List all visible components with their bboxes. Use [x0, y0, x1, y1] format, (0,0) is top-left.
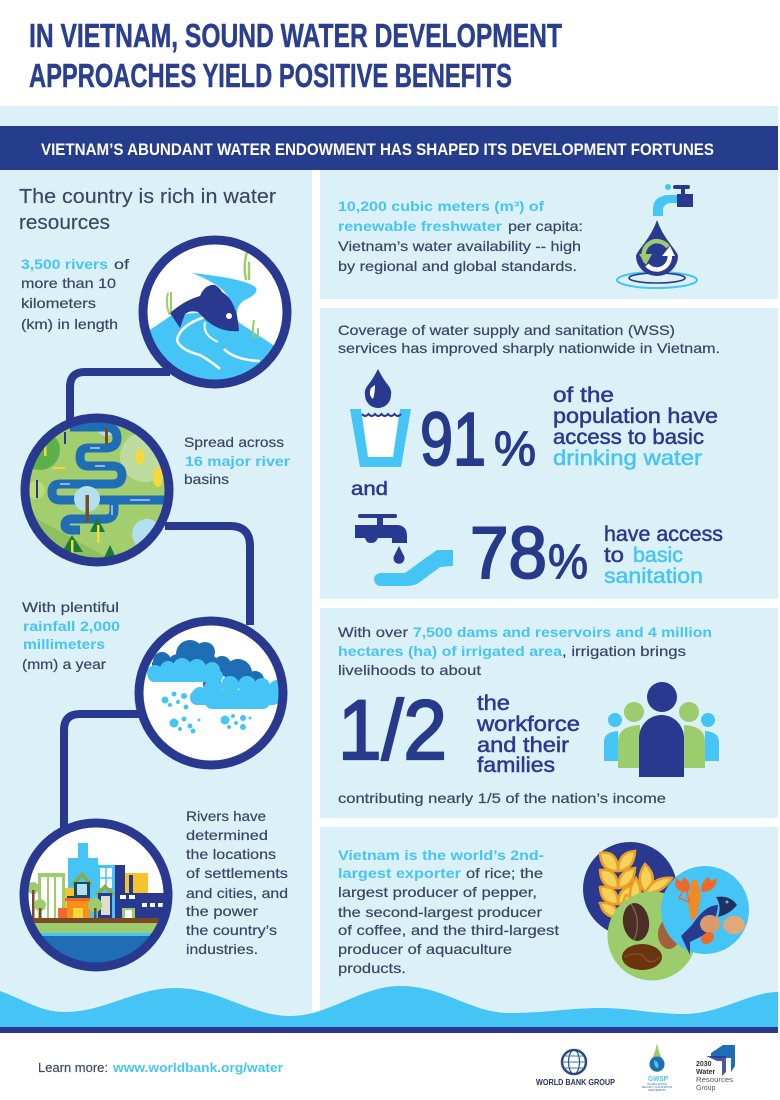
logo: 2030 Water Resources Group — [696, 1045, 735, 1092]
icon: fish and river circle — [130, 240, 290, 400]
footer link — [38, 1061, 283, 1075]
logo: 2030 Water Resources Group: Resources — [696, 1077, 734, 1084]
stat: one half: 1/2 — [338, 683, 447, 777]
text: rivers and settlements: the power — [186, 903, 258, 919]
panel: water availability — [320, 170, 778, 299]
text: dams and irrigated area — [338, 624, 712, 678]
icon: faucet and recycling water drop — [617, 184, 697, 288]
connector lines — [64, 372, 250, 830]
text: rainfall — [22, 599, 120, 672]
logo: GWSP: PARTNERSHIP — [648, 1089, 666, 1092]
text: exports and production — [338, 847, 559, 976]
text: 3,500 rivers: (km) in length — [21, 316, 118, 332]
stat: 91 percent: % — [494, 423, 536, 476]
panel: irrigation — [320, 608, 778, 818]
stat: 91 percent: 91 — [420, 397, 486, 481]
text: drinking water access: drinking water — [553, 447, 702, 470]
panel: top strip background — [0, 106, 778, 126]
text: rivers and settlements: of settlements — [186, 865, 288, 881]
icon: coffee — [608, 892, 696, 980]
text: rivers and settlements: and cities, and — [186, 885, 288, 901]
text: workforce and families: families — [477, 754, 555, 777]
logo: 2030 Water Resources Group: Group — [696, 1085, 716, 1092]
logo: 2030 Water Resources Group: 2030 — [696, 1061, 712, 1068]
text: rivers and settlements: the locations — [186, 846, 276, 862]
text: dams and irrigated area: With over — [338, 624, 408, 640]
text: drinking water access: of the — [553, 384, 614, 407]
text: dams and irrigated area: 7,500 dams and reservoirs and 4 million — [413, 624, 712, 640]
text: rainfall: rainfall 2,000 — [23, 618, 120, 634]
text: workforce and families: and their — [477, 734, 569, 757]
text: river basins — [184, 434, 291, 487]
text: 3,500 rivers: of — [114, 256, 129, 272]
text: workforce and families: the — [477, 692, 510, 715]
text: exports and production: the second-largest producer — [338, 904, 542, 920]
text: 3,500 rivers — [21, 256, 129, 332]
title: IN VIETNAM, SOUND WATER DEVELOPMENT — [29, 17, 562, 54]
logo: GWSP: GLOBAL WATER — [647, 1083, 667, 1086]
banner — [0, 126, 778, 170]
panel: exports — [320, 827, 778, 1030]
title: APPROACHES YIELD POSITIVE BENEFITS — [29, 57, 512, 94]
text: rivers and settlements: the country’s — [186, 922, 277, 938]
icon: rain clouds circle — [139, 621, 285, 765]
stat: 78 percent: % — [548, 536, 588, 589]
heading: rich in water resources: The country is rich in water — [19, 186, 276, 208]
text: rivers and settlements — [186, 808, 288, 957]
icon: rice — [583, 842, 677, 936]
icon: tap and hand — [355, 514, 453, 586]
text: exports and production: products. — [338, 960, 406, 976]
icon: glass of water — [350, 369, 411, 467]
text: sanitation access: to — [604, 544, 624, 567]
text: rivers and settlements: determined — [186, 827, 268, 843]
text: exports and production: of coffee, and the third-largest — [338, 922, 559, 938]
icon: seafood — [661, 866, 749, 955]
text: river basins: Spread across — [184, 434, 284, 450]
text: workforce and families: workforce — [476, 713, 580, 736]
text: 3,500 rivers: 3,500 rivers — [21, 256, 108, 272]
text: coverage intro: services has improved sharply nationwide in Vietnam. — [338, 340, 720, 356]
text: dams and irrigated area: hectares (ha) of irrigated area — [338, 643, 562, 659]
text: sanitation access: sanitation — [604, 565, 703, 588]
icon: river basin circle — [20, 418, 170, 570]
text: exports and production: producer of aquaculture — [338, 941, 512, 957]
stat: 78 percent: 78 — [470, 513, 547, 594]
text: sanitation access — [604, 523, 723, 588]
icon: group of people — [604, 682, 719, 777]
logo: GWSP: GWSP — [648, 1074, 668, 1083]
text: river basins: 16 major river — [185, 453, 291, 469]
footer link: Learn more: — [38, 1061, 108, 1075]
logo: 2030 Water Resources Group: Water — [696, 1069, 715, 1076]
stat: 78 percent — [470, 513, 588, 594]
text: sanitation access: basic — [633, 544, 683, 567]
text: renewable freshwater: per capita: — [508, 218, 583, 234]
text: rivers and settlements: industries. — [186, 941, 258, 957]
logo: GWSP: SECURITY & SANITATION — [642, 1086, 672, 1089]
text: renewable freshwater: 10,200 cubic meters (m³) of — [338, 198, 544, 214]
text: renewable freshwater: renewable freshwater — [338, 218, 503, 234]
text: river basins: basins — [184, 471, 229, 487]
text: and: and — [351, 479, 388, 500]
text: drinking water access: population have — [553, 405, 718, 428]
text: exports and production: largest producer of pepper, — [338, 884, 537, 900]
text: exports and production: largest exporter — [338, 865, 462, 881]
text: exports and production: of rice; the — [466, 865, 543, 881]
logo: World Bank Group: WORLD BANK GROUP — [536, 1078, 616, 1087]
wave banner — [0, 986, 778, 1033]
heading: rich in water resources: resources — [19, 212, 110, 234]
text: dams and irrigated area: , irrigation brings — [562, 643, 686, 659]
logo: World Bank Group — [536, 1050, 616, 1087]
text: national income: contributing nearly 1/5 of the nation’s income — [338, 790, 666, 806]
text: rainfall: millimeters — [23, 636, 105, 652]
text: renewable freshwater: by regional and global standards. — [338, 258, 577, 274]
banner: VIETNAM’S ABUNDANT WATER ENDOWMENT HAS SHAPED ITS DEVELOPMENT FORTUNES — [41, 140, 714, 159]
text: rainfall: With plentiful — [22, 599, 119, 615]
heading: rich in water resources — [19, 186, 276, 234]
text: rivers and settlements: Rivers have — [186, 808, 266, 824]
text: 3,500 rivers: kilometers — [21, 295, 96, 311]
text: coverage intro — [338, 322, 720, 356]
panel: left column background — [0, 170, 312, 1030]
text: 3,500 rivers: more than 10 — [21, 275, 116, 291]
text: drinking water access: access to basic — [553, 426, 704, 449]
text: workforce and families — [476, 692, 580, 777]
text: dams and irrigated area: livelihoods to about — [338, 662, 481, 678]
panel: water supply and sanitation coverage — [320, 308, 778, 599]
text: rainfall: (mm) a year — [22, 656, 106, 672]
title — [29, 17, 562, 94]
text: renewable freshwater: Vietnam’s water availability -- high — [338, 238, 581, 254]
icon: city circle — [20, 818, 172, 972]
logo: GWSP — [642, 1043, 672, 1092]
text: drinking water access — [553, 384, 718, 470]
footer link: www.worldbank.org/water — [112, 1061, 283, 1075]
text: coverage intro: Coverage of water supply and sanitation (WSS) — [338, 322, 675, 338]
text: sanitation access: have access — [604, 523, 723, 546]
text: exports and production: Vietnam is the world’s 2nd- — [338, 847, 544, 863]
text: renewable freshwater — [338, 198, 583, 274]
